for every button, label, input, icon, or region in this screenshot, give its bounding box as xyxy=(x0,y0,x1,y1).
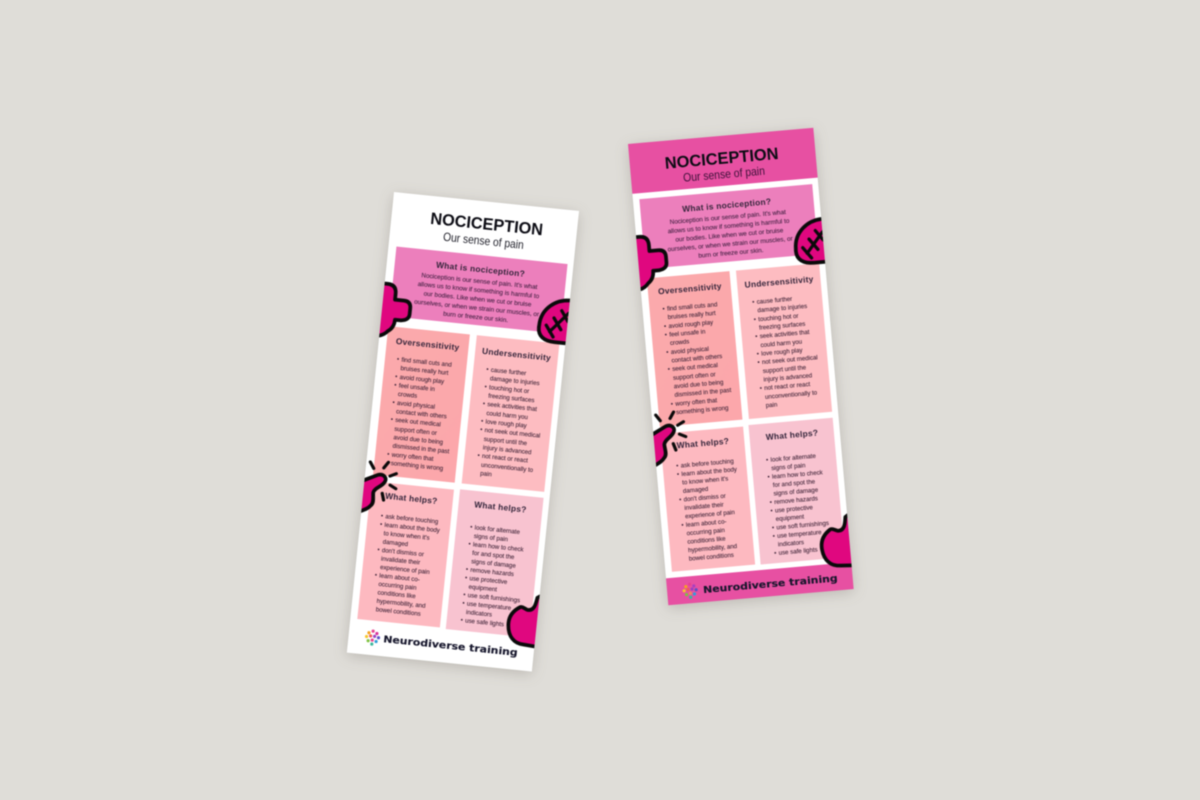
panel: what helps undersensitivity: use temperature xyxy=(777,529,822,540)
panel: oversensitivity: • xyxy=(387,451,390,458)
panel: what helps oversensitivity: occurring pain xyxy=(686,527,725,537)
panel: what helps oversensitivity: • xyxy=(677,471,679,478)
panel: what helps undersensitivity: • xyxy=(772,533,775,540)
panel: oversensitivity: something is wrong xyxy=(676,405,729,416)
panel: what helps undersensitivity: • xyxy=(770,508,773,515)
panel: what helps oversensitivity: damaged xyxy=(382,539,408,548)
panel: what helps undersensitivity: signs of damage xyxy=(773,487,819,498)
panel: what helps oversensitivity xyxy=(357,481,454,627)
panel: what helps undersensitivity: remove hazards xyxy=(774,495,818,506)
panel: what helps oversensitivity: conditions like xyxy=(687,535,726,546)
panel: undersensitivity: could harm you xyxy=(486,410,528,421)
panel: what is nociception: Nociception is our sense of pain. It's what xyxy=(421,272,538,291)
panel: what helps undersensitivity: signs of pain xyxy=(771,462,806,472)
panel: what helps oversensitivity: • xyxy=(381,513,383,520)
panel: oversensitivity: worry often that xyxy=(390,451,434,463)
panel: what helps oversensitivity: • xyxy=(676,463,679,470)
panel: undersensitivity: injury is advanced xyxy=(483,444,532,456)
panel: what helps oversensitivity: • xyxy=(679,497,682,504)
panel: what helps undersensitivity: learn how to check xyxy=(473,541,525,554)
panel: what helps oversensitivity: ask before touching xyxy=(680,458,734,470)
panel: undersensitivity: cause further xyxy=(490,367,527,377)
icon: stitched wound xyxy=(793,219,829,264)
panel: what helps undersensitivity: use safe lights xyxy=(778,547,818,557)
panel: oversensitivity: • xyxy=(392,399,395,406)
panel: what is nociception: Nociception is our sense of pain. It's what xyxy=(669,209,786,226)
panel: what helps undersensitivity: • xyxy=(774,550,777,557)
panel: what helps oversensitivity: don't dismiss or xyxy=(683,493,726,503)
panel: oversensitivity: Oversensitivity xyxy=(658,281,722,296)
panel: what helps oversensitivity: learn about the body xyxy=(681,466,738,478)
panel: what helps oversensitivity: • xyxy=(377,547,380,554)
panel: oversensitivity: find small cuts and xyxy=(667,301,718,313)
panel: what is nociception: burn or freeze our skin. xyxy=(698,247,764,260)
panel: undersensitivity: injury is advanced xyxy=(763,372,812,384)
panel: what helps oversensitivity: hypermobility, and xyxy=(376,598,426,610)
panel: oversensitivity: worry often that xyxy=(674,397,718,408)
panel: oversensitivity: something is wrong xyxy=(390,460,443,472)
panel: undersensitivity: • xyxy=(752,299,755,306)
panel: what helps undersensitivity: use protective xyxy=(469,575,508,586)
panel: what helps undersensitivity: • xyxy=(465,575,467,582)
panel: what helps undersensitivity: • xyxy=(766,457,769,464)
icon: sore finger with rays xyxy=(358,460,398,516)
panel: undersensitivity: not react or react xyxy=(482,453,528,465)
panel: what helps undersensitivity: • xyxy=(767,474,770,481)
panel: oversensitivity: • xyxy=(390,417,393,424)
panel: undersensitivity: seek activities that xyxy=(487,401,537,413)
footer logo xyxy=(682,570,838,600)
panel: what helps oversensitivity: experience of pain xyxy=(685,509,735,520)
panel: what is nociception: allows us to know if something is harmful to xyxy=(417,281,540,300)
icon: plaster cross xyxy=(376,283,412,339)
panel: what helps oversensitivity: occurring pain xyxy=(378,581,417,592)
panel: what helps oversensitivity: hypermobility, and xyxy=(688,543,737,554)
panel: undersensitivity: • xyxy=(482,401,485,408)
panel: what helps oversensitivity: don't dismiss or xyxy=(382,547,424,558)
panel: oversensitivity: contact with others xyxy=(671,353,723,365)
panel: what helps undersensitivity: • xyxy=(772,525,774,532)
panel: undersensitivity: • xyxy=(481,418,484,425)
panel: undersensitivity: • xyxy=(484,384,487,391)
panel: what helps undersensitivity: • xyxy=(468,541,471,548)
panel: what helps oversensitivity: bowel conditions xyxy=(689,552,734,563)
panel: what helps undersensitivity xyxy=(748,418,845,565)
panel: undersensitivity: touching hot or xyxy=(489,384,530,395)
panel: oversensitivity: seek out medical xyxy=(672,362,718,373)
panel: undersensitivity: • xyxy=(754,316,756,323)
panel: oversensitivity: • xyxy=(395,373,398,381)
panel: what is nociception: ourselves, or when we strain our muscles, or xyxy=(667,236,793,253)
panel: undersensitivity: support until the xyxy=(763,364,807,375)
icon: plaster cross xyxy=(633,235,669,290)
panel: what helps undersensitivity: • xyxy=(770,499,772,506)
panel: undersensitivity xyxy=(462,335,559,492)
panel: undersensitivity: freezing surfaces xyxy=(759,321,806,332)
panel: what helps undersensitivity: signs of damage xyxy=(471,558,517,570)
panel: what helps undersensitivity: use temperature xyxy=(467,601,512,612)
icon: stitched wound xyxy=(538,298,574,344)
panel: what helps undersensitivity: • xyxy=(466,566,468,573)
footer logo xyxy=(364,629,519,661)
panel: undersensitivity: • xyxy=(486,366,489,374)
panel: undersensitivity: support until the xyxy=(483,436,528,447)
panel: undersensitivity: • xyxy=(757,360,760,367)
card: white version xyxy=(344,192,583,672)
panel: what helps oversensitivity xyxy=(660,427,755,572)
panel: undersensitivity: Undersensitivity xyxy=(744,274,814,290)
panel: oversensitivity: contact with others xyxy=(396,408,447,421)
panel: undersensitivity: • xyxy=(755,334,758,341)
panel: what helps undersensitivity: use soft furnishings xyxy=(467,592,520,604)
panel: what helps oversensitivity: learn about co- xyxy=(379,573,420,584)
panel: oversensitivity: bruises really hurt xyxy=(668,310,716,321)
panel: undersensitivity: • xyxy=(760,385,762,393)
title: NOCICEPTION xyxy=(430,209,544,239)
panel: oversensitivity: support often or xyxy=(394,426,437,437)
panel: oversensitivity: avoid due to being xyxy=(674,379,724,390)
panel: undersensitivity: damage to injuries xyxy=(490,375,540,388)
panel: what helps oversensitivity: ask before touching xyxy=(385,513,439,526)
panel: what helps undersensitivity: • xyxy=(470,524,473,531)
panel: undersensitivity: • xyxy=(480,427,483,434)
panel: what helps undersensitivity: • xyxy=(462,600,465,607)
panel: undersensitivity: unconventionally to xyxy=(765,389,818,401)
panel: what helps undersensitivity: look for alternate xyxy=(770,453,817,464)
panel: what helps oversensitivity: to know when it's xyxy=(383,530,430,542)
panel: what helps undersensitivity: remove hazards xyxy=(470,567,514,578)
panel: what helps undersensitivity: • xyxy=(460,617,463,624)
panel: oversensitivity: • xyxy=(666,349,669,356)
icon: sore finger with rays xyxy=(649,411,688,467)
panel: what helps oversensitivity: learn about co- xyxy=(686,518,727,529)
panel: undersensitivity: pain xyxy=(766,401,778,409)
panel: undersensitivity: Undersensitivity xyxy=(482,346,552,363)
card: pink version xyxy=(625,127,858,605)
footer band xyxy=(666,562,854,605)
panel: what helps oversensitivity: What helps? xyxy=(385,491,438,506)
panel: what is nociception: burn or freeze our skin. xyxy=(443,311,509,324)
panel: oversensitivity: feel unsafe in xyxy=(669,328,706,339)
footer logo: Neurodiverse training xyxy=(703,573,838,596)
panel: what is nociception: allows us to know if something is harmful to xyxy=(668,218,790,235)
panel: oversensitivity xyxy=(373,326,470,483)
panel: undersensitivity: • xyxy=(477,453,480,460)
panel: oversensitivity: avoid due to being xyxy=(393,434,443,446)
panel: oversensitivity: avoid rough play xyxy=(668,319,714,330)
panel: what helps undersensitivity: for and spot the xyxy=(773,478,816,489)
panel: what is nociception: What is nociception? xyxy=(436,260,525,279)
icon: flame burn xyxy=(506,591,544,647)
panel: what helps oversensitivity: experience of pain xyxy=(380,564,430,576)
panel: what helps undersensitivity: What helps? xyxy=(765,428,819,442)
icon: flame burn xyxy=(819,512,856,568)
panel: undersensitivity: • xyxy=(757,351,759,358)
panel: what helps undersensitivity: use soft furnishings xyxy=(776,520,829,532)
panel: oversensitivity: • xyxy=(662,306,665,313)
title: NOCICEPTION xyxy=(664,144,779,173)
panel: undersensitivity: touching hot or xyxy=(758,313,799,323)
panel: undersensitivity: love rough play xyxy=(485,419,528,430)
panel: undersensitivity: not seek out medical xyxy=(762,354,818,366)
panel: undersensitivity: pain xyxy=(480,470,492,478)
panel: oversensitivity: • xyxy=(394,382,397,389)
panel: what helps oversensitivity: learn about the body xyxy=(384,522,441,535)
panel: what is nociception: What is nociception? xyxy=(682,196,772,214)
panel: oversensitivity: • xyxy=(668,366,670,374)
panel: what helps undersensitivity: look for alternate xyxy=(474,524,521,536)
panel: undersensitivity: freezing surfaces xyxy=(488,393,535,404)
panel: undersensitivity xyxy=(736,263,832,419)
panel: what is nociception: our bodies. Like when we cut or bruise xyxy=(423,291,532,309)
panel: oversensitivity: avoid physical xyxy=(397,400,435,411)
panel: what helps undersensitivity: learn how to check xyxy=(772,469,824,481)
panel: what helps undersensitivity: equipment xyxy=(468,584,498,594)
panel: undersensitivity: cause further xyxy=(756,296,793,306)
subtitle: Our sense of pain xyxy=(683,165,765,185)
subtitle: Our sense of pain xyxy=(442,231,524,252)
panel: what is nociception: our bodies. Like when we cut or bruise xyxy=(675,227,784,244)
panel: oversensitivity: • xyxy=(664,323,667,330)
panel: oversensitivity xyxy=(647,271,742,427)
panel: oversensitivity: • xyxy=(397,356,399,363)
panel: what helps oversensitivity: • xyxy=(380,521,382,529)
panel: what helps undersensitivity: • xyxy=(463,592,466,599)
panel: what helps oversensitivity: • xyxy=(374,572,377,579)
panel: what helps undersensitivity: indicators xyxy=(778,539,804,548)
panel: what helps undersensitivity: use safe lights xyxy=(465,618,504,628)
panel: oversensitivity: avoid rough play xyxy=(399,374,445,385)
panel: oversensitivity: • xyxy=(665,332,667,339)
panel: what helps undersensitivity: What helps? xyxy=(474,499,527,515)
panel: what helps oversensitivity: conditions like xyxy=(377,589,417,600)
panel: what helps oversensitivity: to know when it's xyxy=(682,476,729,487)
panel: what helps oversensitivity: What helps? xyxy=(676,436,729,450)
footer logo: Neurodiverse training xyxy=(383,634,518,659)
panel: undersensitivity: seek activities that xyxy=(760,329,810,340)
panel: what helps undersensitivity: equipment xyxy=(775,514,805,523)
panel: oversensitivity: support often or xyxy=(673,371,716,382)
panel: what is nociception xyxy=(389,247,568,334)
panel: oversensitivity: dismissed in the past xyxy=(392,443,450,456)
panel: what helps undersensitivity: for and spot the xyxy=(472,550,515,561)
panel: undersensitivity: damage to injuries xyxy=(757,303,807,315)
panel: undersensitivity: unconventionally to xyxy=(481,462,534,474)
header band xyxy=(628,128,818,194)
panel: oversensitivity: find small cuts and xyxy=(401,357,452,369)
panel: what helps oversensitivity: invalidate their xyxy=(381,556,420,567)
panel: what is nociception: ourselves, or when we strain our muscles, or xyxy=(414,299,539,318)
panel: oversensitivity: crowds xyxy=(398,391,417,400)
panel: oversensitivity: feel unsafe in xyxy=(398,383,435,393)
panel: oversensitivity: Oversensitivity xyxy=(395,336,460,352)
panel: what helps undersensitivity xyxy=(446,489,544,638)
panel: undersensitivity: not react or react xyxy=(764,381,811,392)
panel: oversensitivity: crowds xyxy=(670,339,690,347)
panel: oversensitivity: seek out medical xyxy=(395,417,441,429)
panel: undersensitivity: could harm you xyxy=(760,338,802,349)
panel: what helps undersensitivity: use protective xyxy=(775,504,814,515)
panel: what helps oversensitivity: damaged xyxy=(683,486,709,495)
panel: what helps oversensitivity: invalidate their xyxy=(684,502,724,512)
panel: what is nociception xyxy=(639,184,818,269)
panel: oversensitivity: bruises really hurt xyxy=(400,365,449,377)
panel: oversensitivity: avoid physical xyxy=(671,346,709,356)
panel: undersensitivity: love rough play xyxy=(761,347,804,358)
panel: undersensitivity: not seek out medical xyxy=(484,427,541,440)
panel: what helps oversensitivity: bowel conditions xyxy=(375,606,421,618)
panel: oversensitivity: dismissed in the past xyxy=(674,387,732,399)
panel: oversensitivity: • xyxy=(671,401,673,408)
panel: what helps oversensitivity: • xyxy=(681,522,684,529)
panel: what helps undersensitivity: signs of pain xyxy=(473,533,508,543)
panel: what helps undersensitivity: indicators xyxy=(466,609,492,619)
